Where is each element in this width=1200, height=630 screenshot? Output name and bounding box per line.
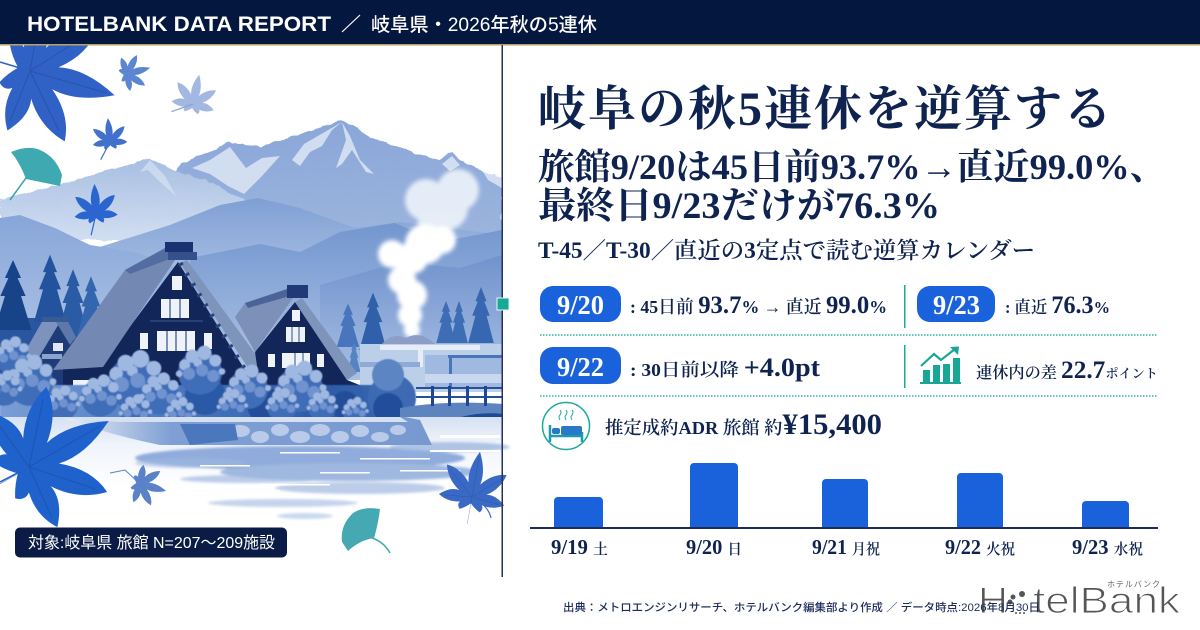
header title: HOTELBANK DATA REPORT bbox=[27, 13, 331, 36]
KPI 9/22: 9/22 bbox=[557, 352, 604, 382]
maple leaf: small bottom bbox=[127, 463, 171, 510]
vertical divider with marker bbox=[497, 45, 509, 577]
subtitle: 最終日9/23だけが76.3% bbox=[538, 185, 940, 227]
KPI 9/23: 9/23 bbox=[933, 290, 980, 320]
bar chart bbox=[530, 463, 1158, 559]
illustration: Shirakawa-go autumn scene bbox=[0, 0, 513, 557]
small thatched house bbox=[23, 317, 78, 395]
main house windows bbox=[73, 276, 212, 396]
HotelBank logo bbox=[978, 580, 1181, 621]
icon: rising chart bbox=[920, 346, 961, 384]
ADR text: 推定成約ADR 旅館 約¥15,400 bbox=[605, 408, 882, 441]
target label bbox=[15, 528, 287, 558]
KPI 9/20: : 45日前 93.7% → 直近 99.0% bbox=[630, 292, 887, 319]
maple leaf: large top-left bbox=[0, 0, 132, 156]
maple leaf: bottom right bbox=[435, 446, 513, 530]
sub heading: T-45／T-30／直近の3定点で読む逆算カレンダー bbox=[538, 238, 1035, 263]
maple leaf: small top bbox=[116, 51, 155, 93]
forward ridge right bbox=[190, 223, 502, 380]
second house windows bbox=[268, 310, 324, 368]
steam plume bbox=[378, 169, 479, 338]
bar 9/22 bbox=[957, 473, 1003, 528]
ginkgo leaf: upper bbox=[10, 148, 62, 200]
onsen town buildings bbox=[360, 335, 502, 392]
bar 9/21 bbox=[822, 479, 868, 528]
header bar bbox=[0, 0, 1200, 46]
KPI spread: 連休内の差 22.7ポイント bbox=[976, 357, 1158, 384]
header slash bbox=[342, 15, 360, 32]
main thatched house bbox=[53, 242, 262, 400]
ginkgo leaf: lower bbox=[342, 508, 390, 553]
river with reflections bbox=[0, 417, 510, 519]
axis labels: 9/23 水祝 bbox=[1072, 535, 1143, 559]
axis labels: 9/20 日 bbox=[686, 535, 742, 559]
second thatched house bbox=[235, 285, 372, 400]
far mountain with snow bbox=[150, 120, 502, 330]
bar 9/20 bbox=[690, 463, 738, 528]
pine trees right bbox=[337, 287, 494, 372]
KPI 9/20 bbox=[540, 286, 887, 322]
second mountain bbox=[0, 159, 300, 240]
trees and shrubs bbox=[0, 336, 416, 428]
bar 9/19 bbox=[554, 497, 603, 528]
HotelBank logo: H bbox=[978, 580, 1008, 621]
maple leaf: large bottom-left bbox=[0, 364, 142, 552]
maple leaf: pale bbox=[169, 70, 220, 120]
bridge bbox=[400, 386, 503, 443]
mid ridge bbox=[90, 198, 502, 330]
maple leaf: lower left sky bbox=[73, 183, 119, 236]
axis labels: 9/19 土 bbox=[551, 535, 608, 559]
KPI 9/20: 9/20 bbox=[557, 290, 604, 320]
KPI 9/23: : 直近 76.3% bbox=[1005, 292, 1110, 319]
icon: hot spring bed bbox=[542, 402, 590, 450]
pine trees left bbox=[0, 255, 110, 380]
KPI 9/23 bbox=[917, 286, 1110, 322]
source note: 出典：メトロエンジンリサーチ、ホテルバンク編集部より作成 ／ データ時点:2026年8月30日 bbox=[563, 600, 1040, 614]
forward ridge left bbox=[0, 215, 190, 420]
maple leaf: mid bbox=[91, 117, 129, 160]
HotelBank logo: telBank bbox=[1033, 580, 1181, 621]
axis labels bbox=[551, 535, 1143, 559]
KPI 9/22: : 30日前以降 +4.0pt bbox=[630, 353, 820, 382]
subtitle bbox=[538, 147, 1166, 227]
header subtitle: 岐阜県・2026年秋の5連休 bbox=[371, 14, 597, 36]
KPI 9/22 bbox=[540, 347, 820, 384]
main title: 岐阜の秋5連休を逆算する bbox=[538, 83, 1112, 136]
axis labels: 9/21 月祝 bbox=[812, 535, 880, 559]
axis labels: 9/22 火祝 bbox=[945, 535, 1015, 559]
stone wall bbox=[40, 417, 432, 445]
bar 9/23 bbox=[1082, 501, 1129, 528]
target label: 対象:岐阜県 旅館 N=207〜209施設 bbox=[28, 534, 275, 552]
HotelBank logo: ホテルバンク bbox=[1107, 580, 1160, 589]
subtitle: 旅館9/20は45日前93.7%→直近99.0%、 bbox=[538, 147, 1166, 187]
